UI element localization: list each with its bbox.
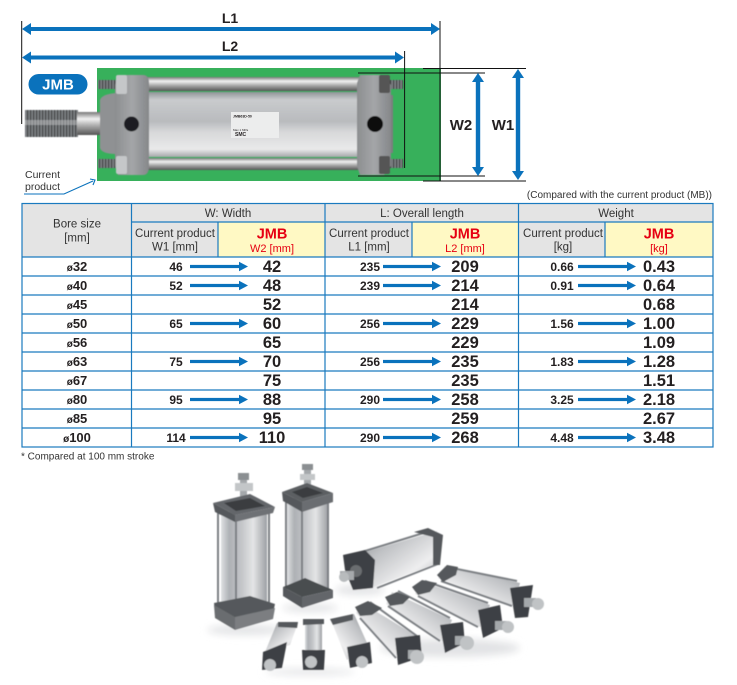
header labels: JMB (644, 226, 674, 242)
arrow: W2 (472, 73, 484, 176)
callout: current product: Current (25, 169, 60, 181)
product label: SMC (235, 132, 246, 138)
row: bore 40: 48 (263, 277, 281, 295)
header labels: Current product (523, 228, 604, 240)
header labels: L2 [mm] (445, 243, 485, 255)
row: bore 67: 235 (451, 372, 479, 390)
dimension lines (22, 21, 526, 181)
badge: JMB (28, 74, 88, 94)
header labels: Current product (329, 228, 410, 240)
row: bore 40: 0.91 (550, 279, 574, 293)
header labels: JMB (450, 226, 480, 242)
row: bore 63: 70 (263, 353, 281, 371)
row: bore 63: 1.28 (643, 353, 675, 371)
product label: Max 1 MPa (233, 128, 249, 132)
row: bore 56: ø56 (67, 335, 87, 350)
row: bore 63: 75 (169, 355, 183, 369)
row: bore 32: 209 (451, 258, 479, 276)
row: bore 100: 3.48 (643, 429, 675, 447)
arrow: L1 (22, 23, 440, 35)
cylinder: small upright (302, 619, 325, 670)
header labels: Bore size (53, 218, 101, 230)
row: bore 56: 1.09 (643, 334, 675, 352)
row: bore 63: 256 (360, 355, 380, 369)
comparison note: (Compared with the current product (MB)) (527, 190, 712, 201)
cylinder: large vertical (213, 473, 275, 630)
badge: JMB: JMB (42, 76, 74, 94)
footnote: * Compared at 100 mm stroke (21, 452, 155, 462)
row: bore 40: ø40 (67, 278, 87, 293)
cylinder: second right (412, 580, 514, 638)
header labels: [kg] (650, 243, 668, 255)
row: bore 100: 4.48 (550, 431, 574, 445)
row: bore 67: 75 (263, 372, 281, 390)
label: W1: W1 (492, 117, 514, 134)
row: bore 63: 235 (451, 353, 479, 371)
row: bore 56: 229 (451, 334, 479, 352)
header labels: L1 [mm] (348, 242, 390, 254)
row: bore 80: ø80 (67, 392, 87, 407)
current product outline: green area (97, 68, 441, 181)
row: bore 80: 3.25 (550, 393, 574, 407)
row: bore 50: 1.00 (643, 315, 675, 333)
label: L2: L2 (222, 38, 238, 54)
cylinder: fourth right (355, 601, 424, 665)
row: bore 80: 290 (360, 393, 380, 407)
product label: JMB63D-50 (233, 114, 252, 118)
row: bore 85 (67, 410, 675, 428)
cylinder: second vertical (282, 464, 333, 608)
row: bore 32: 46 (169, 260, 183, 274)
header labels: [kg] (554, 242, 572, 254)
header labels: W2 [mm] (250, 243, 294, 255)
row: bore 80: 95 (169, 393, 183, 407)
row: bore 67 (67, 372, 675, 390)
header labels: Current product (135, 228, 216, 240)
cylinder: large horizontal (339, 528, 443, 590)
row: bore 32: 0.66 (550, 260, 574, 274)
row: bore 85: 95 (263, 410, 281, 428)
product label (231, 112, 279, 138)
label: L1: L1 (222, 10, 238, 26)
cylinder: smallest (262, 622, 298, 671)
comparison table (22, 204, 713, 447)
cylinder illustration (25, 75, 403, 175)
row: bore 45: 0.68 (643, 296, 675, 314)
row: bore 50: 1.56 (550, 317, 574, 331)
label: W2: W2 (450, 117, 472, 134)
row: bore 67: 1.51 (643, 372, 675, 390)
header labels: W1 [mm] (152, 242, 198, 254)
diagram: cylinder dimensions (22, 10, 526, 194)
row: bore 80 (67, 391, 675, 409)
soft shadows (207, 585, 520, 675)
row: bore 32: 235 (360, 260, 380, 274)
row: bore 100: 268 (451, 429, 479, 447)
row: bore 56 (67, 334, 675, 352)
row: bore 63: 1.83 (550, 355, 574, 369)
row: bore 50: 256 (360, 317, 380, 331)
row: bore 45: 52 (263, 296, 281, 314)
row: bore 100: 110 (259, 429, 285, 447)
row: bore 50: 65 (169, 317, 183, 331)
arrow: L2 (22, 52, 404, 64)
row: bore 85: ø85 (67, 411, 87, 426)
header labels (53, 208, 674, 255)
cylinder: back right (437, 565, 544, 618)
table grid (22, 204, 713, 447)
row: bore 100: ø100 (63, 430, 91, 445)
row: bore 40: 52 (169, 279, 183, 293)
row: bore 32: 42 (263, 258, 281, 276)
product photo: cylinder range (207, 464, 544, 675)
row: bore 40: 0.64 (643, 277, 676, 295)
row: bore 80: 2.18 (643, 391, 675, 409)
row: bore 32: 0.43 (643, 258, 675, 276)
row: bore 50 (67, 315, 675, 333)
header labels: [mm] (64, 232, 90, 244)
row: bore 80: 88 (263, 391, 281, 409)
header labels: Weight (598, 208, 635, 220)
row: bore 45: 214 (451, 296, 480, 314)
row: bore 80: 258 (451, 391, 479, 409)
callout: current product: product (25, 181, 60, 193)
row: bore 63: ø63 (67, 354, 87, 369)
row: bore 40 (67, 277, 676, 295)
header labels: JMB (257, 226, 287, 242)
row: bore 56: 65 (263, 334, 281, 352)
row: bore 63 (67, 353, 675, 371)
header labels: W: Width (205, 208, 251, 220)
header labels: L: Overall length (380, 208, 464, 220)
row: bore 40: 214 (451, 277, 480, 295)
row: bore 32 (67, 258, 675, 276)
arrow: W1 (512, 69, 524, 180)
row: bore 45 (67, 296, 675, 314)
row: bore 50: 60 (263, 315, 281, 333)
row: bore 85: 2.67 (643, 410, 675, 428)
row: bore 40: 239 (360, 279, 380, 293)
cylinder: small slanted (330, 614, 372, 668)
row: bore 50: ø50 (67, 316, 87, 331)
row: bore 32: ø32 (67, 259, 87, 274)
row: bore 100: 290 (360, 431, 380, 445)
row: bore 85: 259 (451, 410, 479, 428)
row: bore 50: 229 (451, 315, 479, 333)
row: bore 67: ø67 (67, 373, 87, 388)
table header backgrounds (22, 204, 713, 257)
callout: current product (24, 169, 95, 194)
row: bore 45: ø45 (67, 297, 87, 312)
row: bore 100 (63, 429, 675, 447)
row: bore 100: 114 (166, 431, 186, 445)
cylinder: third right (385, 591, 474, 653)
